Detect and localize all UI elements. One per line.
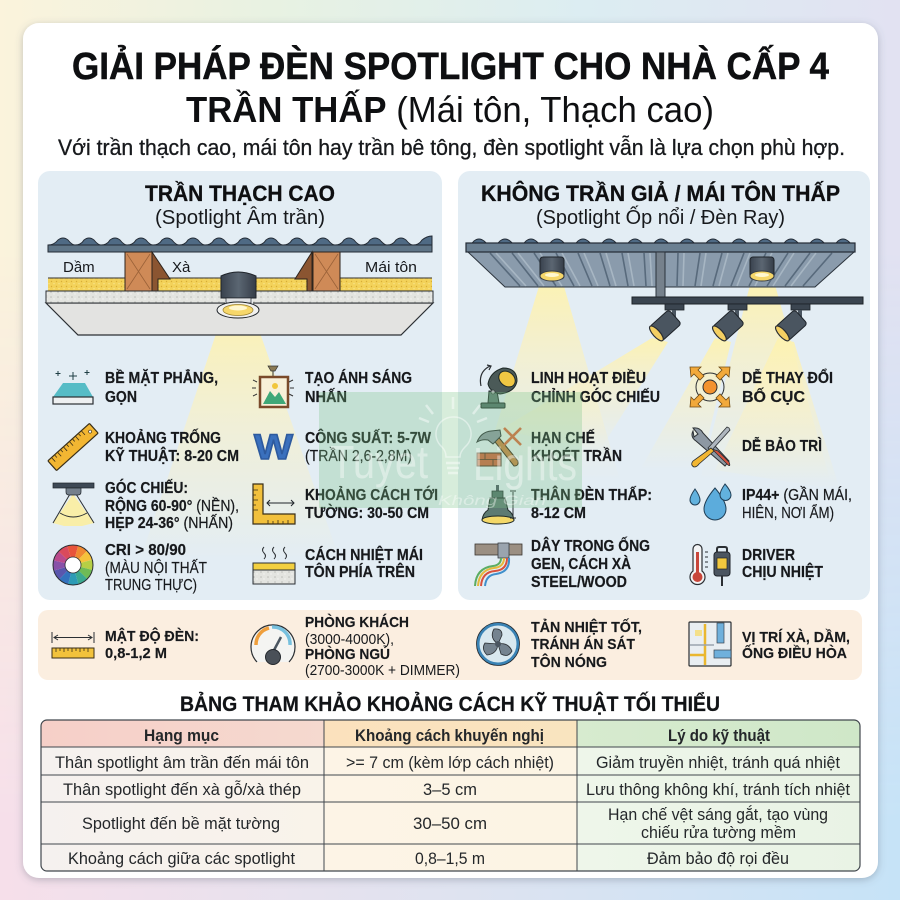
feature: linh hoạt điều chỉnh góc chiếu: LINH HOẠT ĐIỀU bbox=[531, 370, 646, 387]
table header: Lý do kỹ thuật bbox=[668, 726, 770, 745]
row 2: Thân spotlight đến xà gỗ/xà thép bbox=[63, 780, 301, 799]
feature: thân đèn thấp: THÂN ĐÈN THẤP: bbox=[531, 486, 652, 504]
feature: CRI bbox=[53, 542, 207, 594]
tip: phòng khách / phòng ngủ: PHÒNG NGỦ bbox=[305, 645, 390, 663]
watermark: Tuyet bbox=[330, 436, 428, 488]
feature: tạo ánh sáng nhấn: TẠO ÁNH SÁNG bbox=[305, 370, 412, 387]
surface spotlights bbox=[540, 257, 774, 281]
feature: dây trong ống gen: GEN, CÁCH XÀ bbox=[531, 556, 631, 573]
diagram: recessed spotlight in gypsum ceiling: Mái tôn bbox=[365, 259, 417, 276]
feature: bề mặt phẳng: BỀ MẶT PHẲNG, bbox=[105, 369, 218, 387]
light beams bbox=[480, 283, 840, 490]
tip: mật độ đèn: MẬT ĐỘ ĐÈN: bbox=[105, 627, 199, 645]
row 4: Khoảng cách giữa các spotlight bbox=[68, 849, 295, 868]
row 3 bbox=[82, 805, 828, 842]
feature: góc chiếu: GÓC CHIẾU: bbox=[105, 479, 188, 497]
tip: phòng khách / phòng ngủ: (3000-4000K), bbox=[305, 631, 394, 648]
panel heading: KHÔNG TRẦN GIẢ / MÁI TÔN THẤP bbox=[481, 181, 840, 206]
feature: khoảng trống kỹ thuật: KHOẢNG TRỐNG bbox=[105, 429, 221, 447]
feature: công suất: W bbox=[254, 428, 293, 467]
feature: driver chịu nhiệt: CHỊU NHIỆT bbox=[742, 563, 823, 581]
feature: thân đèn thấp bbox=[482, 485, 652, 524]
subtitle: Với trần thạch cao, mái tôn hay trần bê tông, đèn spotlight vẫn là lựa chọn phù hợp. bbox=[58, 135, 845, 160]
feature: dễ thay đổi bố cục bbox=[690, 367, 833, 407]
feature: công suất: CÔNG SUẤT: 5-7W bbox=[305, 429, 431, 447]
diagram: recessed spotlight in gypsum ceiling: Xà bbox=[172, 259, 191, 276]
light beam from recessed spotlight bbox=[140, 316, 340, 560]
feature: khoảng cách tới tường: TƯỜNG: 30-50 CM bbox=[305, 504, 429, 522]
feature: dễ thay đổi bố cục: BỐ CỤC bbox=[742, 388, 805, 406]
table header bbox=[144, 726, 770, 745]
feature: tạo ánh sáng nhấn: NHẤN bbox=[305, 389, 347, 406]
tip: tản nhiệt: TẢN NHIỆT TỐT, bbox=[531, 618, 642, 636]
watermark: Lights bbox=[473, 438, 577, 490]
row 1 bbox=[55, 753, 840, 772]
feature: CRI: CRI > 80/90 bbox=[105, 542, 186, 559]
feature: tạo ánh sáng nhấn bbox=[252, 366, 412, 407]
feature: cách nhiệt mái tôn bbox=[253, 546, 423, 584]
feature: linh hoạt điều chỉnh góc chiếu: CHỈNH GÓC CHIẾU bbox=[531, 388, 660, 406]
tip: phòng khách / phòng ngủ bbox=[251, 613, 460, 679]
row 3: 30–50 cm bbox=[413, 814, 487, 833]
feature: thân đèn thấp: 8-12 CM bbox=[531, 505, 586, 522]
tip: tản nhiệt: TÔN NÓNG bbox=[531, 653, 607, 671]
feature: IP44+: HIÊN, NƠI ẨM) bbox=[742, 504, 834, 522]
panel: trần thạch cao bbox=[38, 171, 442, 600]
feature: dễ thay đổi bố cục: DỄ THAY ĐỔI bbox=[742, 369, 833, 387]
diagram: surface spotlights and track bbox=[466, 239, 863, 343]
row 2: 3–5 cm bbox=[423, 780, 477, 799]
row 1: >= 7 cm (kèm lớp cách nhiệt) bbox=[346, 753, 554, 772]
row 3: Hạn chế vệt sáng gắt, tạo vùng bbox=[608, 805, 828, 824]
feature: cách nhiệt mái tôn: CÁCH NHIỆT MÁI bbox=[305, 546, 423, 564]
feature: bề mặt phẳng bbox=[53, 369, 218, 406]
row 3: Spotlight đến bề mặt tường bbox=[82, 814, 280, 833]
feature: IP44+ bbox=[690, 484, 852, 522]
watermark bbox=[319, 392, 582, 508]
row 1: Thân spotlight âm trần đến mái tôn bbox=[55, 753, 309, 772]
tip: tản nhiệt: TRÁNH ÁN SÁT bbox=[531, 636, 635, 653]
watermark: Không Gian bbox=[438, 492, 546, 508]
title: GIẢI PHÁP ĐÈN SPOTLIGHT CHO NHÀ CẤP 4 bbox=[72, 44, 829, 88]
title bbox=[72, 44, 829, 130]
feature: công suất bbox=[254, 428, 431, 467]
table heading: BẢNG THAM KHẢO KHOẢNG CÁCH KỸ THUẬT TỐI THIỂU bbox=[180, 692, 720, 716]
table header: Khoảng cách khuyến nghị bbox=[355, 726, 544, 745]
reference table bbox=[41, 720, 860, 871]
diagram: recessed spotlight in gypsum ceiling: Dầm bbox=[63, 259, 95, 276]
tip: mật độ đèn bbox=[52, 627, 199, 662]
feature: cách nhiệt mái tôn: TÔN PHÍA TRÊN bbox=[305, 563, 415, 581]
tip: vị trí xà, dầm: VỊ TRÍ XÀ, DẦM, bbox=[742, 629, 850, 646]
panel heading bbox=[145, 181, 335, 229]
feature: khoảng cách tới tường: KHOẢNG CÁCH TỚI bbox=[305, 486, 438, 504]
panel heading: (Spotlight Ốp nổi / Đèn Ray) bbox=[536, 205, 785, 229]
table header: Hạng mục bbox=[144, 726, 219, 745]
feature: dễ bảo trì: DỄ BẢO TRÌ bbox=[742, 438, 822, 455]
track heads bbox=[647, 304, 810, 343]
tip: tản nhiệt bbox=[476, 618, 642, 671]
row 4: Đảm bảo độ rọi đều bbox=[647, 849, 789, 868]
feature: bề mặt phẳng: GỌN bbox=[105, 389, 137, 406]
tip: vị trí xà, dầm: ỐNG ĐIỀU HÒA bbox=[742, 644, 847, 662]
row 4: 0,8–1,5 m bbox=[415, 849, 485, 868]
feature: dễ bảo trì bbox=[692, 427, 822, 467]
table fills bbox=[41, 720, 860, 871]
feature: dây trong ống gen: DÂY TRONG ỐNG bbox=[531, 537, 650, 555]
diagram: recessed spotlight in gypsum ceiling bbox=[46, 236, 433, 335]
row 1: Giảm truyền nhiệt, tránh quá nhiệt bbox=[596, 753, 840, 772]
feature: góc chiếu: RỘNG 60-90° (NỀN), bbox=[105, 497, 239, 515]
feature: hạn chế khoét trần bbox=[477, 428, 622, 466]
feature: khoảng trống kỹ thuật: KỸ THUẬT: 8-20 CM bbox=[105, 447, 239, 465]
panel heading: TRẦN THẠCH CAO bbox=[145, 181, 335, 206]
feature: hạn chế khoét trần: HẠN CHẾ bbox=[531, 430, 595, 447]
row 4 bbox=[68, 849, 789, 868]
feature: dây trong ống gen bbox=[475, 537, 650, 591]
row 2 bbox=[63, 780, 850, 799]
feature: IP44+: IP44+ (GẦN MÁI, bbox=[742, 487, 852, 504]
feature: công suất: (TRẦN 2,6-2,8M) bbox=[305, 448, 412, 465]
feature: khoảng cách tới tường bbox=[253, 484, 438, 524]
feature: góc chiếu bbox=[53, 479, 239, 532]
feature: CRI: TRUNG THỰC) bbox=[105, 577, 197, 594]
feature: driver chịu nhiệt bbox=[690, 544, 823, 586]
feature: dây trong ống gen: STEEL/WOOD bbox=[531, 574, 627, 591]
row 3: chiếu rửa tường mềm bbox=[641, 823, 796, 842]
row 2: Lưu thông không khí, tránh tích nhiệt bbox=[586, 780, 850, 799]
feature: driver chịu nhiệt: DRIVER bbox=[742, 547, 795, 564]
panel heading: (Spotlight Âm trần) bbox=[155, 206, 325, 229]
feature: linh hoạt điều chỉnh góc chiếu bbox=[480, 365, 660, 408]
feature: góc chiếu: HẸP 24-36° (NHẤN) bbox=[105, 515, 233, 532]
title: TRẦN THẤP (Mái tôn, Thạch cao) bbox=[186, 89, 714, 130]
tip: phòng khách / phòng ngủ: PHÒNG KHÁCH bbox=[305, 613, 409, 631]
panel heading bbox=[481, 181, 840, 229]
band: tips bbox=[38, 610, 862, 680]
feature: CRI: (MÀU NỘI THẤT bbox=[105, 560, 207, 577]
feature: hạn chế khoét trần: KHOÉT TRẦN bbox=[531, 448, 622, 465]
tip: vị trí xà, dầm bbox=[689, 622, 850, 666]
panel: không trần giả / mái tôn thấp bbox=[458, 171, 870, 600]
tip: mật độ đèn: 0,8-1,2 M bbox=[105, 645, 167, 662]
feature: khoảng trống kỹ thuật bbox=[48, 423, 239, 471]
tip: phòng khách / phòng ngủ: (2700-3000K + DIMMER) bbox=[305, 662, 460, 679]
